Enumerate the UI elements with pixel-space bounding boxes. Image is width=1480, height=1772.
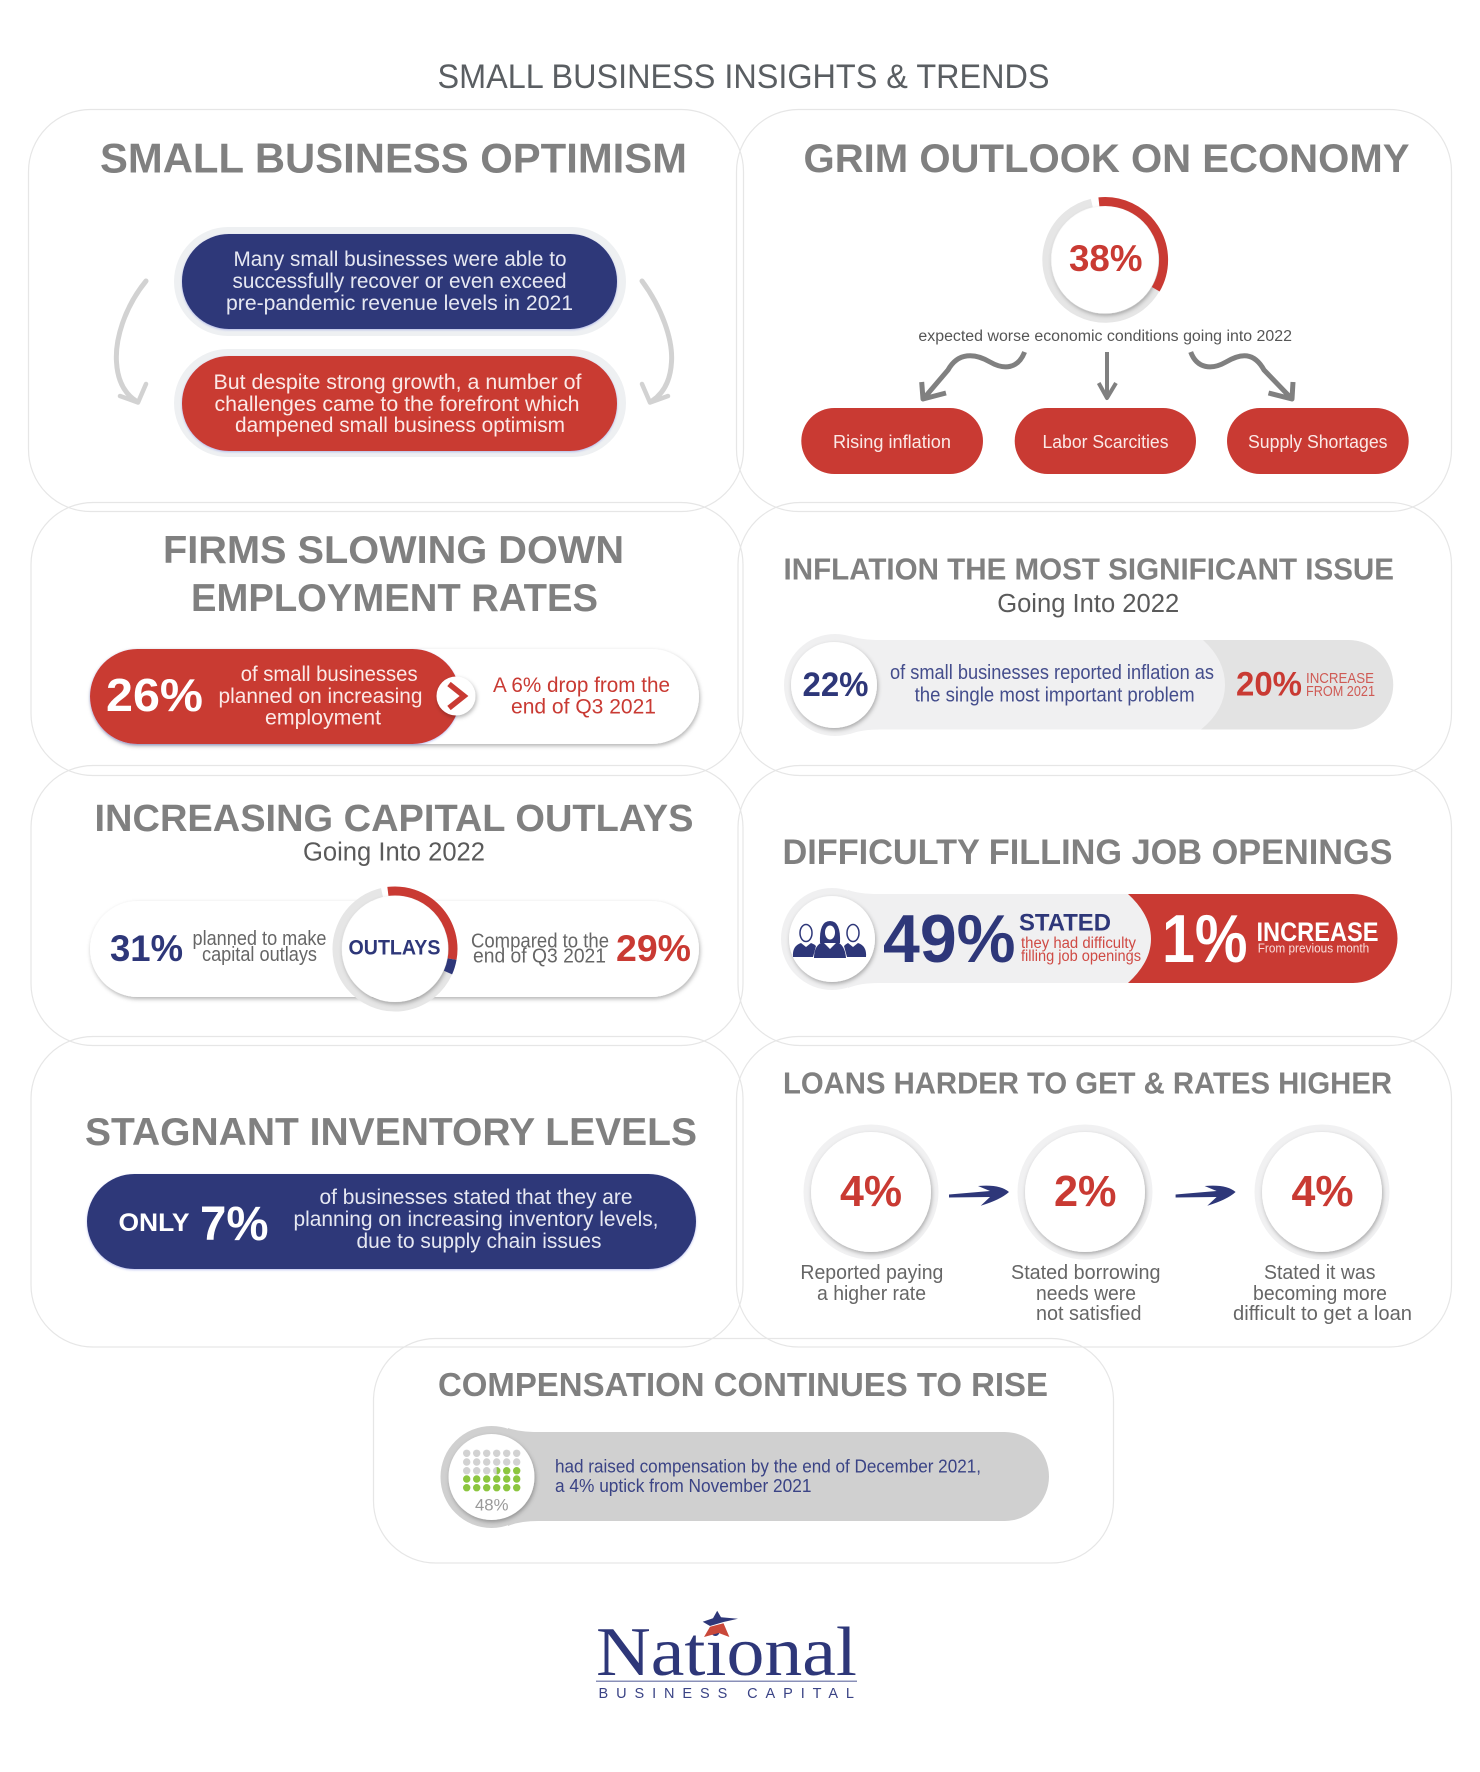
button: labor scarcities: Labor Scarcities <box>1042 431 1168 452</box>
stat: 4 percent harder to get: Stated it was <box>1264 1262 1376 1284</box>
heading: capital outlays: INCREASING CAPITAL OUTLAYS <box>94 798 694 840</box>
heading: compensation: COMPENSATION CONTINUES TO RISE <box>438 1367 1048 1404</box>
panel: loans harder to get <box>736 1036 1452 1347</box>
pill: 22 percent inflation <box>784 634 1393 736</box>
icon: three people <box>793 921 866 958</box>
pill: only 7 percent: due to supply chain issues <box>356 1229 602 1253</box>
stat: 4 percent harder to get <box>1233 1124 1412 1325</box>
stat: 2 percent not satisfied: Stated borrowing <box>1011 1262 1160 1284</box>
button: rising inflation <box>801 408 983 474</box>
arrow: left curved <box>116 281 146 402</box>
pill: 26 percent employment: A 6% drop from the <box>493 673 670 697</box>
pill: 49 percent stated: filling job openings <box>1021 948 1141 965</box>
callout: recovery: Many small businesses were able to <box>234 247 567 271</box>
pill: 49 percent stated: From previous month <box>1258 942 1369 956</box>
chart: 38 percent donut <box>1047 201 1164 318</box>
pill: only 7 percent: of businesses stated that they are <box>320 1185 632 1209</box>
pill: 26 percent employment: end of Q3 2021 <box>511 694 656 718</box>
pill: only 7 percent <box>87 1174 696 1269</box>
chart: outlays donut <box>337 891 453 1007</box>
stat: 4 percent harder to get: difficult to get a loan <box>1233 1303 1412 1325</box>
pill: 26 percent employment <box>90 649 699 744</box>
heading: firms slowing down: FIRMS SLOWING DOWN <box>163 529 624 572</box>
callout: challenges <box>174 349 626 457</box>
stat: 4 percent higher rate: a higher rate <box>817 1283 926 1305</box>
pill: 49 percent stated: INCREASE <box>1256 917 1378 947</box>
heading: job openings: DIFFICULTY FILLING JOB OPENINGS <box>782 833 1392 872</box>
pill: only 7 percent: ONLY <box>118 1209 190 1237</box>
title: SMALL BUSINESS INSIGHTS & TRENDS <box>438 58 1050 96</box>
chart: dot grid <box>463 1450 520 1491</box>
arrow: to supply shortages <box>1191 352 1293 399</box>
pill: 49 percent stated <box>781 888 1398 990</box>
pill: outlays comparison: 31% <box>110 928 183 969</box>
heading: firms slowing down: EMPLOYMENT RATES <box>191 577 598 620</box>
arrow: right curved <box>642 281 672 402</box>
pill: outlays comparison: planned to make <box>192 928 326 950</box>
heading: small business optimism: SMALL BUSINESS OPTIMISM <box>100 134 687 182</box>
pill: 48 percent compensation <box>440 1426 1049 1528</box>
pill: outlays comparison <box>90 901 699 997</box>
pill: 22 percent inflation: 22% <box>802 666 868 704</box>
subheading: going into 2022: Going Into 2022 <box>303 838 485 866</box>
stat: 2 percent not satisfied: 2% <box>1054 1167 1116 1216</box>
heading: firms slowing down <box>163 529 624 620</box>
chart: outlays donut: OUTLAYS <box>348 936 440 960</box>
pill: 26 percent employment: planned on increasing <box>218 684 422 708</box>
pill: 49 percent stated: 49% <box>883 901 1016 977</box>
icon: chevron <box>436 676 476 716</box>
pill: 26 percent employment: employment <box>265 706 381 730</box>
panel: grim outlook on economy <box>736 110 1452 512</box>
icon: logo star <box>703 1611 738 1637</box>
button: labor scarcities <box>1015 408 1196 474</box>
pill: 48 percent compensation: a 4% uptick from November 2021 <box>555 1476 812 1496</box>
stat: 4 percent higher rate: Reported paying <box>800 1262 943 1284</box>
logo: National Business Capital: BUSINESS CAPITAL <box>598 1686 854 1702</box>
callout: challenges: dampened small business optimism <box>235 413 565 437</box>
pill: 22 percent inflation: of small businesses reported inflation as <box>890 662 1214 684</box>
arrow: to labor scarcities <box>1099 352 1116 398</box>
stat: 2 percent not satisfied: needs were <box>1036 1283 1136 1305</box>
panel: firms slowing employment <box>31 502 743 776</box>
pill: 49 percent stated: 1% <box>1162 901 1248 977</box>
stat: 4 percent higher rate: 4% <box>840 1167 902 1216</box>
panel: compensation continues to rise <box>374 1338 1114 1563</box>
stat: 2 percent not satisfied: not satisfied <box>1036 1303 1142 1325</box>
pill: 22 percent inflation: the single most important problem <box>915 684 1195 706</box>
callout: challenges: challenges came to the forefront which <box>214 392 580 416</box>
pill: 22 percent inflation: FROM 2021 <box>1306 683 1375 700</box>
callout: recovery <box>174 227 626 336</box>
pill: 22 percent inflation: 20% <box>1236 666 1302 704</box>
button: supply shortages: Supply Shortages <box>1248 431 1388 452</box>
callout: recovery: successfully recover or even exceed <box>232 269 566 293</box>
panel: inflation most significant issue <box>738 502 1452 776</box>
pill: 49 percent stated: STATED <box>1019 909 1111 936</box>
pill: outlays comparison: Compared to the <box>471 931 609 953</box>
panel: difficulty filling job openings <box>738 766 1452 1046</box>
pill: outlays comparison: 29% <box>616 928 691 969</box>
text: expected worse conditions: expected worse economic conditions going into 2022 <box>918 328 1292 345</box>
button: supply shortages <box>1227 408 1409 474</box>
logo: National Business Capital: National <box>596 1614 857 1691</box>
stat: 2 percent not satisfied <box>1011 1124 1160 1325</box>
button: rising inflation: Rising inflation <box>833 431 951 452</box>
chart: 38 percent donut: 38% <box>1069 238 1142 279</box>
arrow: second to third <box>1176 1186 1236 1206</box>
arrow: first to second <box>949 1186 1009 1206</box>
pill: only 7 percent: 7% <box>200 1198 268 1251</box>
stat: 4 percent harder to get: becoming more <box>1253 1283 1387 1305</box>
arrow: to rising inflation <box>922 352 1025 399</box>
panel: small business optimism <box>28 110 744 512</box>
callout: recovery: pre-pandemic revenue levels in 2021 <box>226 291 573 315</box>
pill: 49 percent stated: they had difficulty <box>1021 935 1136 952</box>
pill: 48 percent compensation: had raised compensation by the end of December 2021, <box>555 1457 981 1477</box>
callout: challenges: But despite strong growth, a number of <box>214 370 582 394</box>
stat: 4 percent higher rate <box>800 1124 943 1305</box>
panel: stagnant inventory levels <box>31 1036 743 1347</box>
stat: 4 percent harder to get: 4% <box>1292 1167 1354 1216</box>
subheading: going into 2022: Going Into 2022 <box>997 590 1179 618</box>
pill: 22 percent inflation: INCREASE <box>1306 670 1374 687</box>
heading: loans harder: LOANS HARDER TO GET & RATES HIGHER <box>783 1066 1392 1100</box>
panel: increasing capital outlays <box>31 766 743 1046</box>
pill: outlays comparison: end of Q3 2021 <box>473 946 606 968</box>
pill: 48 percent compensation: 48% <box>475 1496 508 1515</box>
pill: 26 percent employment: 26% <box>106 669 203 721</box>
pill: only 7 percent: planning on increasing inventory levels, <box>294 1207 658 1231</box>
heading: grim outlook: GRIM OUTLOOK ON ECONOMY <box>804 137 1410 181</box>
pill: outlays comparison: capital outlays <box>202 944 317 966</box>
heading: inflation issue: INFLATION THE MOST SIGNIFICANT ISSUE <box>784 552 1394 586</box>
pill: 26 percent employment: of small businesses <box>241 662 418 686</box>
heading: stagnant inventory: STAGNANT INVENTORY LEVELS <box>85 1111 697 1154</box>
